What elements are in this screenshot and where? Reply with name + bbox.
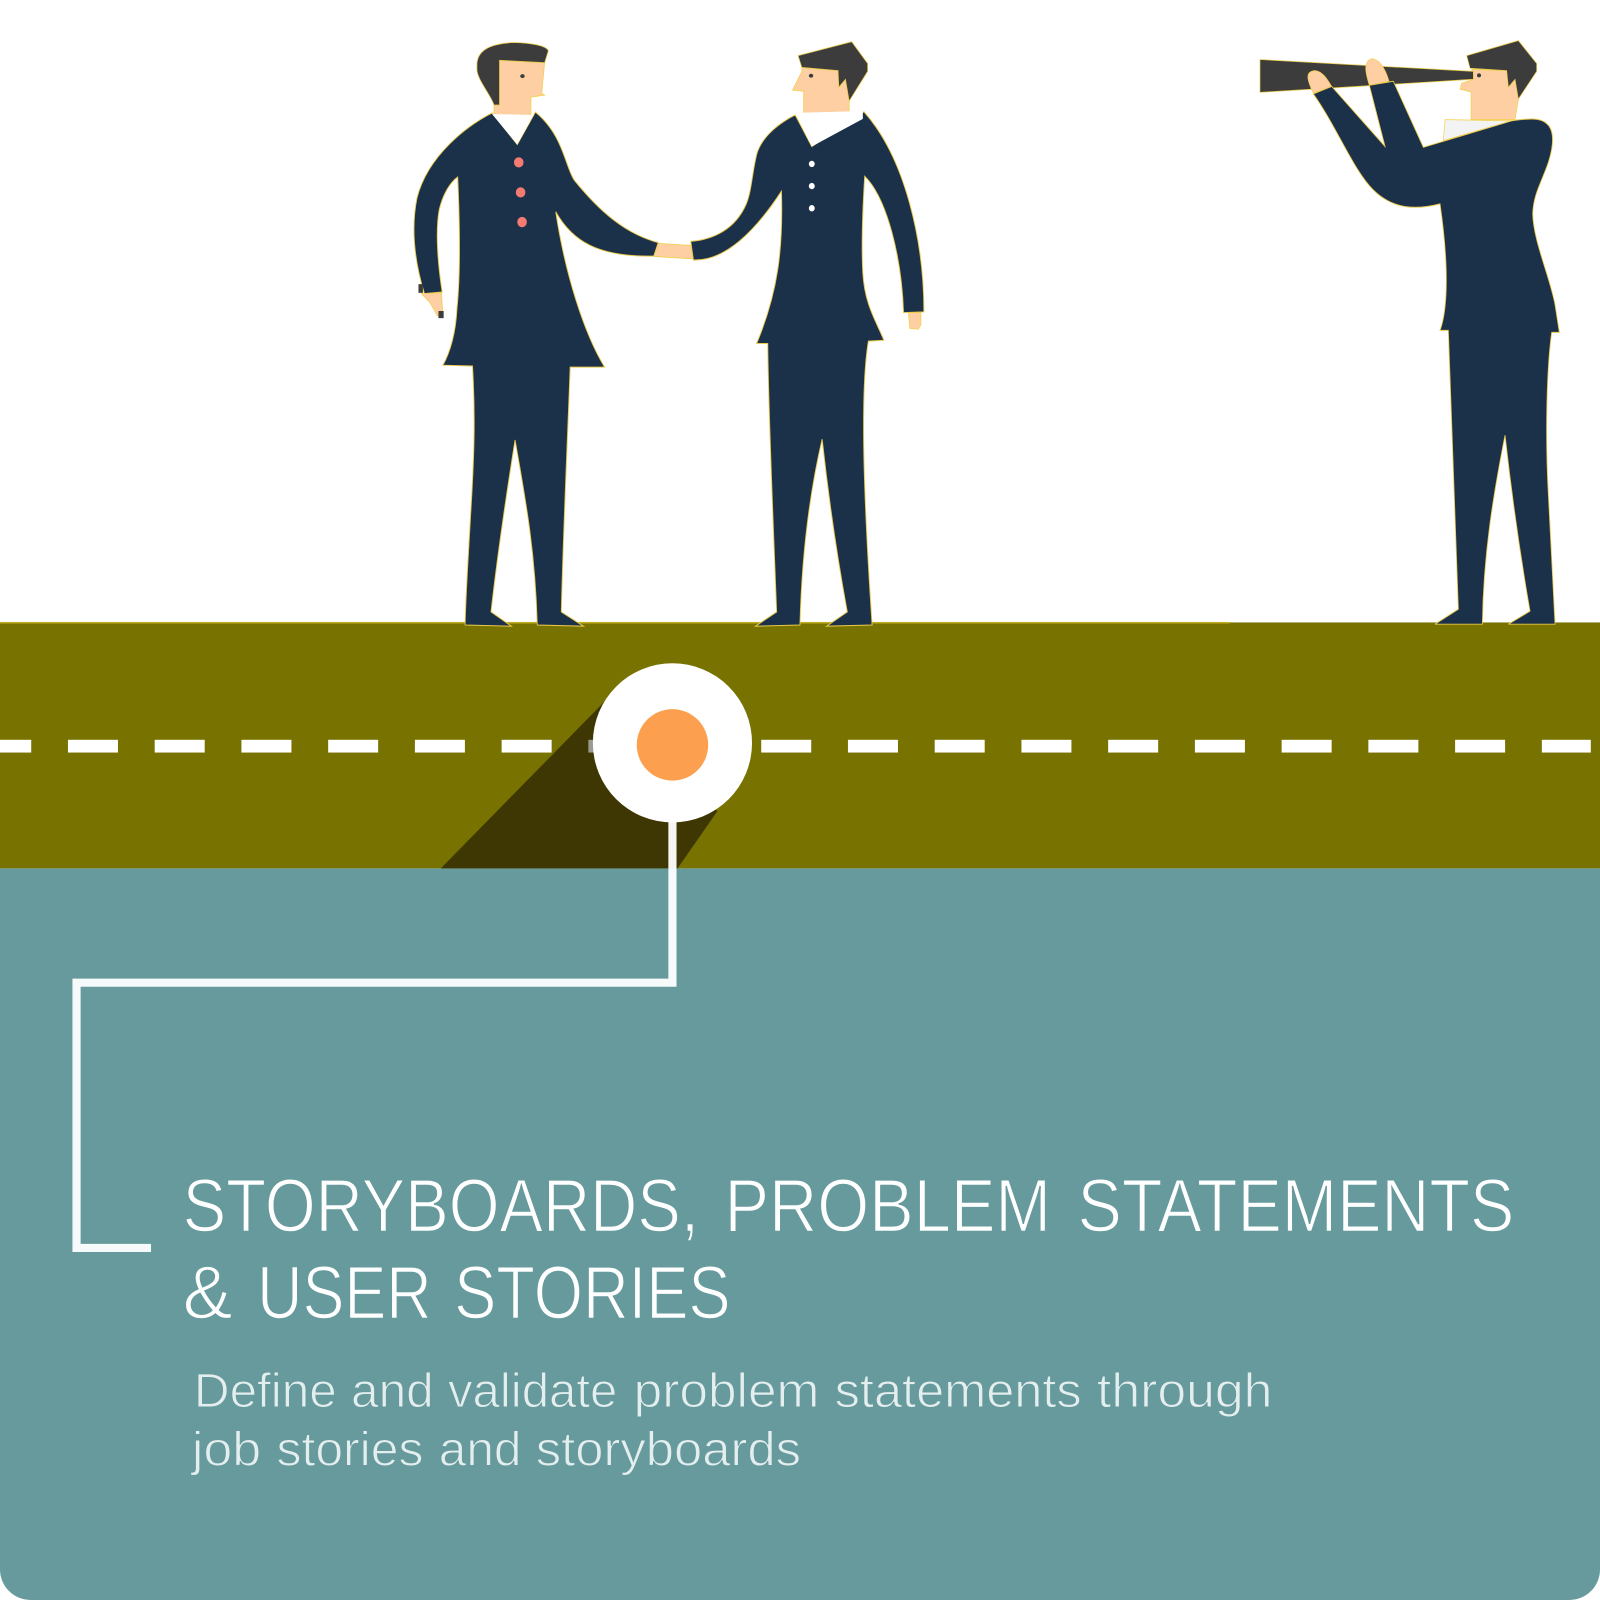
heading: USER: [257, 1251, 432, 1335]
body text: through: [1097, 1365, 1272, 1418]
heading: [183, 1165, 1514, 1335]
heading: STORYBOARDS,: [183, 1165, 699, 1249]
right man eye: [809, 74, 813, 78]
telescope man face: [1460, 69, 1518, 120]
left man face: [494, 60, 545, 115]
left man collar: [492, 114, 534, 145]
body text: Define: [194, 1365, 337, 1418]
telescope man collar: [1443, 120, 1512, 141]
road marker shadow: [441, 702, 717, 868]
telescope man eye: [1477, 73, 1481, 77]
panel: olive road band: [0, 622, 1600, 868]
body text: job: [190, 1423, 261, 1476]
left man body: [414, 112, 658, 626]
body text: [190, 1365, 1272, 1476]
figure: man shaking hands, right: [691, 42, 924, 626]
heading: STORIES: [454, 1251, 731, 1335]
right man buttons: [809, 161, 815, 211]
dashed road line: [0, 740, 1591, 753]
telescope man hands: [1308, 59, 1389, 93]
right man hand: [908, 313, 921, 329]
figure: man shaking hands, left: [414, 43, 658, 626]
right man face: [793, 67, 849, 113]
connector line: [77, 816, 672, 1248]
left man buttons: [514, 157, 527, 227]
right man body: [691, 112, 924, 626]
heading: STATEMENTS: [1078, 1165, 1514, 1249]
body text: statements: [835, 1365, 1082, 1418]
body text: problem: [634, 1365, 819, 1418]
heading: &: [183, 1251, 233, 1335]
heading: PROBLEM: [724, 1165, 1051, 1249]
body text: validate: [448, 1365, 617, 1418]
left man eye: [520, 74, 525, 78]
telescope man hair: [1467, 41, 1537, 99]
right man collar: [795, 111, 863, 147]
figure: man with telescope: [1260, 41, 1559, 624]
body text: and: [351, 1365, 434, 1418]
body text: and: [439, 1423, 521, 1476]
road marker: white circle with orange dot: [593, 663, 752, 822]
body text: storyboards: [536, 1423, 801, 1476]
left man hand: [418, 284, 444, 318]
panel: teal text panel: [0, 868, 1600, 1600]
telescope: [1260, 60, 1473, 92]
left man hair: [477, 43, 548, 105]
right man hair: [798, 42, 868, 101]
body text: stories: [277, 1423, 423, 1476]
telescope man body: [1313, 81, 1559, 624]
icon: handshake hands: [654, 243, 693, 259]
